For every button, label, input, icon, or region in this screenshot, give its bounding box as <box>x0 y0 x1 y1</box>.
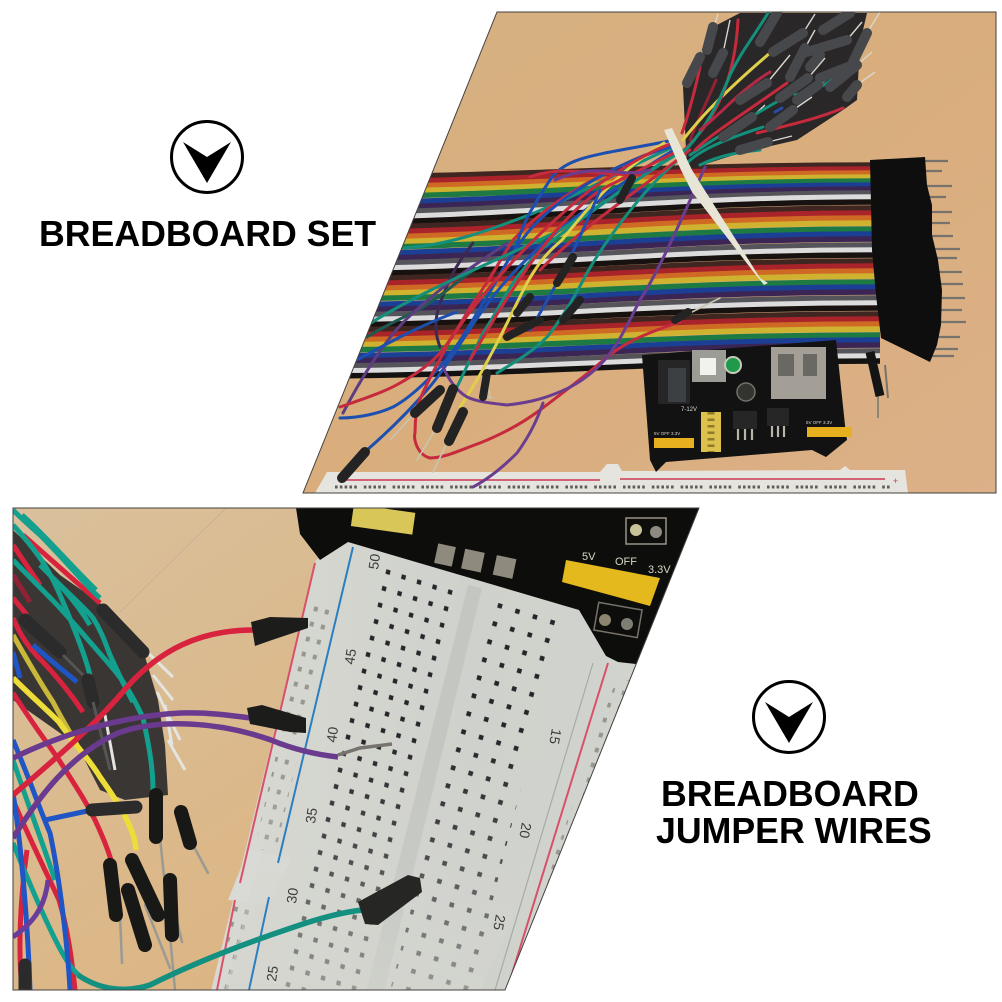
row numbers: 25 <box>263 965 281 982</box>
photo: breadboard with jumper wires close-up <box>10 504 730 995</box>
USB socket <box>771 347 826 399</box>
yellow pin header <box>701 412 721 452</box>
power supply module: 5V OFF 3.3V <box>806 420 832 425</box>
grey sleeves at top of bunch <box>687 13 867 150</box>
black power module edge: OFF <box>615 556 637 568</box>
photo outline 1 <box>303 12 996 493</box>
regulators <box>733 411 757 429</box>
row numbers: 50 <box>365 553 383 570</box>
white breadboard rail <box>315 464 908 493</box>
row numbers: 45 <box>341 648 359 665</box>
power supply module: 5V OFF 3.3V <box>654 431 680 436</box>
dark mass behind background wires <box>13 530 168 800</box>
DC jack <box>658 360 690 404</box>
black power module edge: 5V <box>582 551 596 563</box>
heading group: jumper wires <box>656 682 932 851</box>
foreground sleeves with pins <box>110 795 208 990</box>
heading group: breadboard set <box>39 122 376 254</box>
power supply module <box>642 340 852 472</box>
rail stripes <box>217 563 608 990</box>
row numbers: 35 <box>302 807 320 824</box>
red jumper wire and sleeve <box>13 617 308 795</box>
second purple wire with bare end <box>13 724 392 838</box>
row numbers: 25 <box>490 913 509 932</box>
white breadboard rail: + <box>893 476 898 486</box>
black power module edge <box>296 504 699 664</box>
heading: breadboard set: BREADBOARD SET <box>39 214 376 254</box>
hole banks <box>284 564 458 990</box>
heading group: jumper wires: JUMPER WIRES <box>656 811 932 851</box>
rainbow ribbon cable <box>300 165 880 376</box>
row numbers: 20 <box>516 821 535 840</box>
green jumper wire and sleeve <box>78 875 422 989</box>
white cable tie <box>664 128 768 285</box>
icon: down arrow in circle <box>754 682 824 752</box>
white breadboard body <box>211 542 636 990</box>
photo: breadboard set with ribbon cables <box>300 5 1000 496</box>
background bundle wires <box>13 510 185 995</box>
switch <box>692 350 726 382</box>
upper jumper wires <box>682 13 843 165</box>
row numbers: 15 <box>546 727 565 746</box>
yellow jumpers <box>654 438 694 448</box>
purple jumper wire and sleeve <box>13 705 306 758</box>
capacitor <box>737 383 755 401</box>
lower jumper wires <box>340 140 705 487</box>
board labels: 7-12V <box>681 407 697 413</box>
wire end sleeves <box>342 178 720 478</box>
black connector block with pins <box>870 157 966 362</box>
icon: down arrow in circle <box>172 122 242 192</box>
black sleeves <box>25 610 143 995</box>
photo outline 2 <box>13 508 699 990</box>
row numbers <box>263 553 565 982</box>
bare pins at top of bunch <box>700 5 880 142</box>
dark mass of the top wire bunch <box>683 13 867 170</box>
hole fade <box>225 766 516 990</box>
heading: breadboard jumper wires: BREADBOARD <box>661 774 919 814</box>
single male jumper <box>870 352 888 418</box>
yellow wires <box>13 635 77 745</box>
row numbers: 40 <box>323 726 341 743</box>
row numbers: 30 <box>283 887 301 904</box>
black power module edge: 3.3V <box>648 564 671 576</box>
LED <box>725 357 741 373</box>
